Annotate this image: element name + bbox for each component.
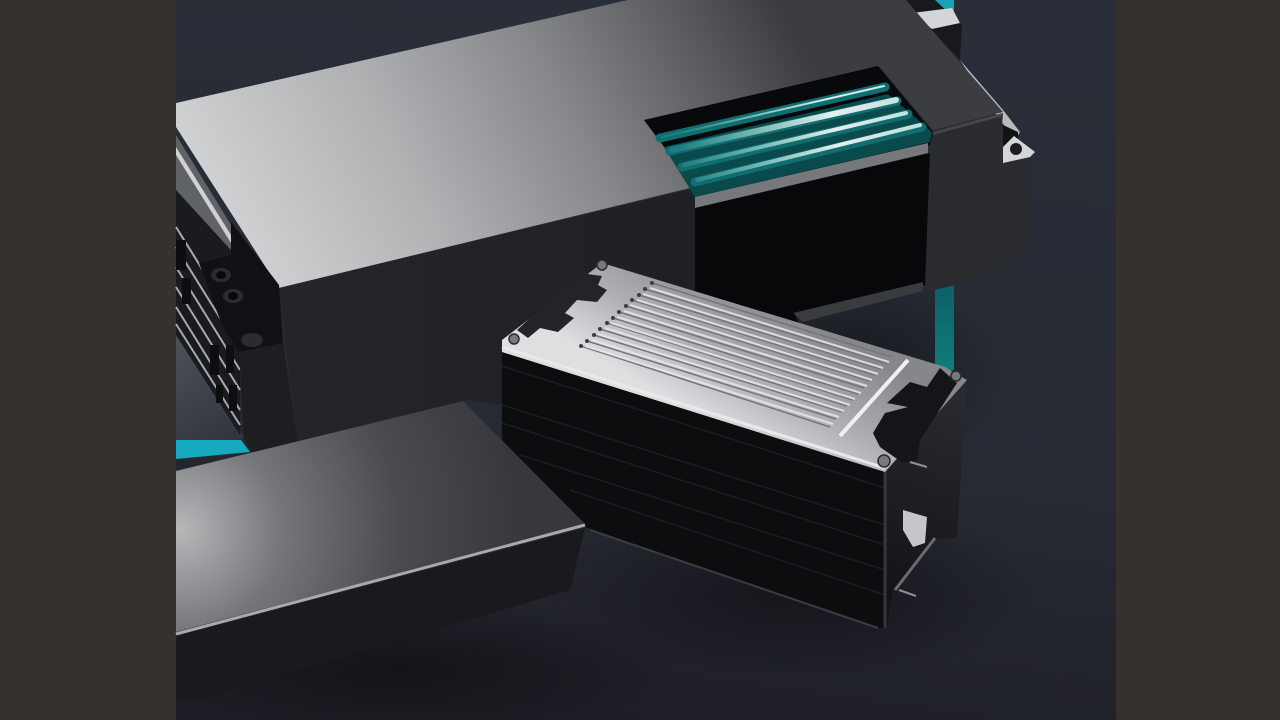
stack bottom edge xyxy=(590,530,878,628)
right side band xyxy=(1116,0,1280,720)
channel end dots xyxy=(579,281,654,348)
soft cast shadows xyxy=(120,260,1040,720)
right black end clip xyxy=(873,368,957,463)
ribbed cooling channels xyxy=(581,283,908,436)
housing right end xyxy=(925,113,1003,292)
inner black panel xyxy=(695,153,930,330)
housing front face xyxy=(279,188,695,448)
large battery housing xyxy=(176,0,1035,452)
left end connector block xyxy=(199,222,283,352)
ribbed left end xyxy=(176,190,240,435)
lid front xyxy=(176,528,585,702)
bright plate rim xyxy=(502,347,885,468)
teal accent lines xyxy=(176,0,954,459)
lid top xyxy=(176,401,585,632)
right rear block xyxy=(990,160,1032,277)
cutaway opening with teal cells xyxy=(644,66,933,198)
top plate xyxy=(502,263,967,472)
blue-grey lower-left wall xyxy=(176,330,244,440)
left black end clip xyxy=(517,273,607,338)
front corner column xyxy=(239,343,298,452)
right mounting tab xyxy=(1003,136,1035,163)
rear bright edge xyxy=(960,60,1020,140)
lower grey rail xyxy=(793,282,923,322)
module black stack front xyxy=(502,350,885,628)
corner bolts xyxy=(509,260,961,467)
battery module xyxy=(502,260,967,628)
stack ribs xyxy=(502,366,885,595)
terminal pins xyxy=(899,462,927,596)
flat battery lid xyxy=(176,401,585,702)
top bracket xyxy=(900,0,962,60)
metal strip xyxy=(895,538,935,590)
dark background surface xyxy=(176,0,1116,720)
lid edge highlight xyxy=(176,525,585,634)
white connector xyxy=(903,510,927,547)
silver strip xyxy=(695,143,928,208)
housing left end panel xyxy=(176,135,231,258)
left side band xyxy=(0,0,176,720)
housing top face xyxy=(176,0,1003,288)
module end face xyxy=(887,378,967,627)
